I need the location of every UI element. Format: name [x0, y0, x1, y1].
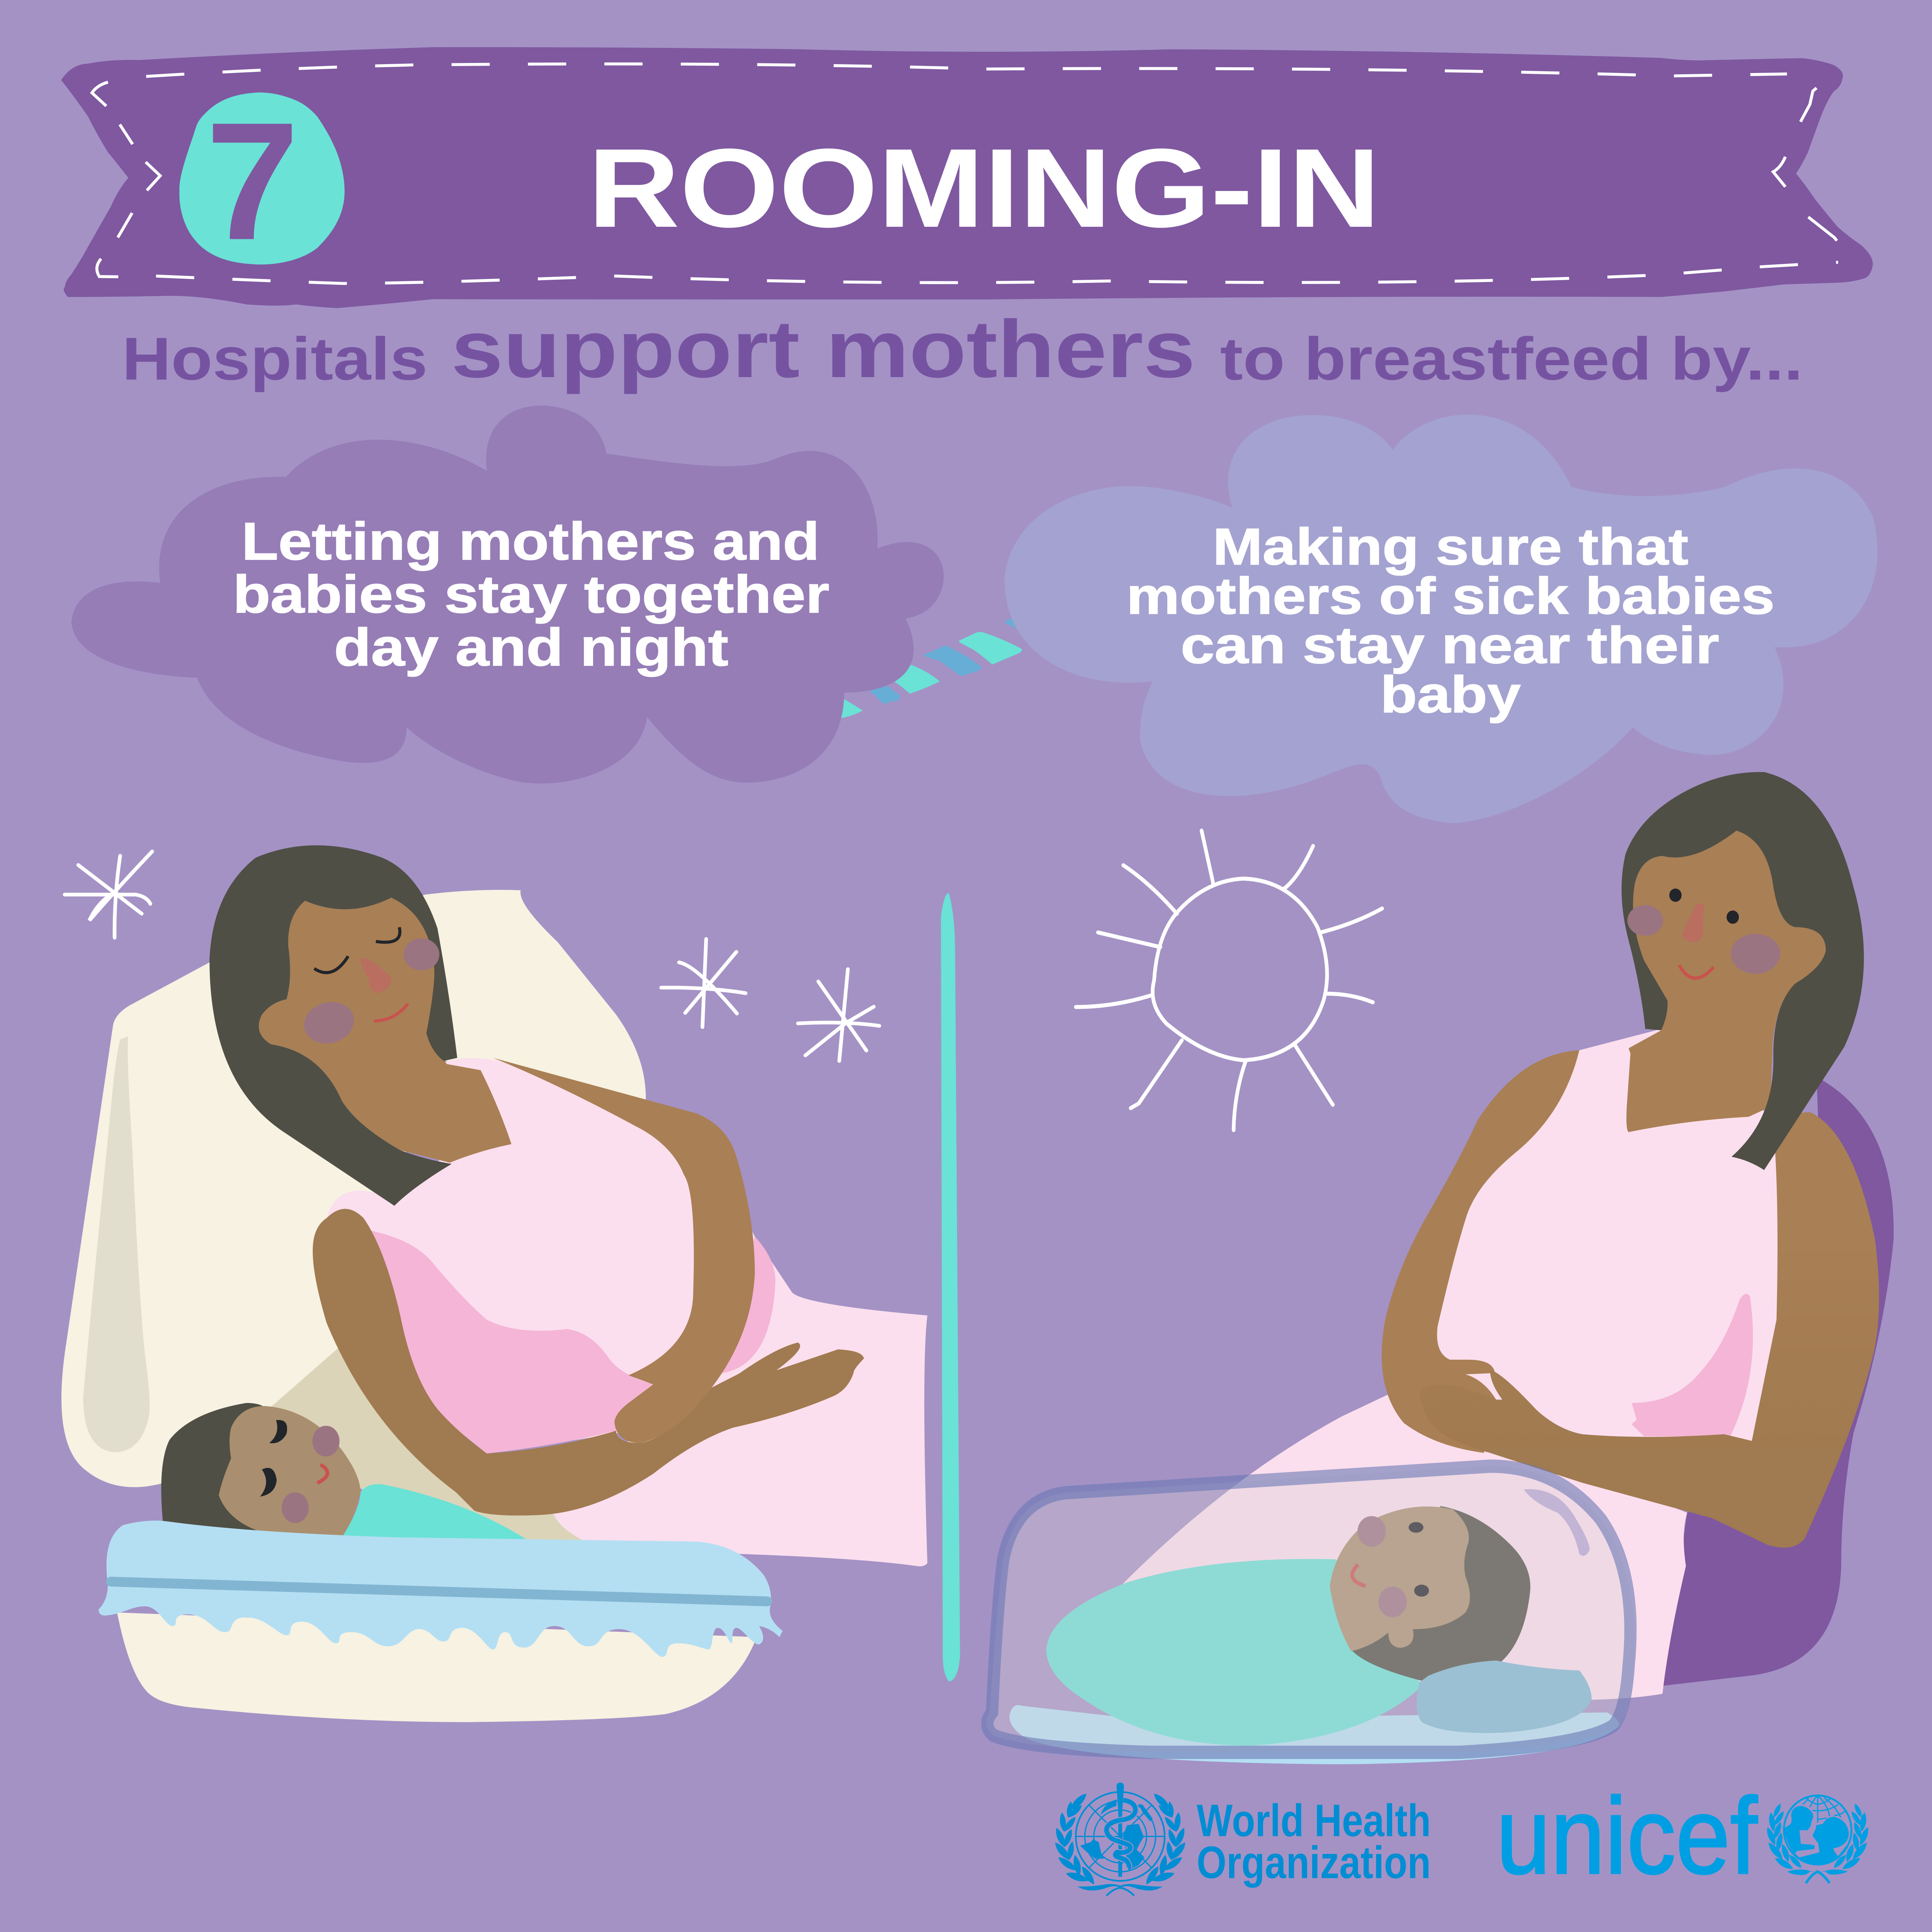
mother dress	[1114, 1029, 1792, 1700]
baby	[161, 1403, 530, 1542]
number badge	[179, 87, 345, 275]
subtitle	[122, 303, 1803, 395]
mother face	[259, 898, 512, 1163]
right cloud text: can stay near their	[1180, 617, 1719, 674]
sick baby	[1046, 1506, 1592, 1746]
banner ribbon	[61, 47, 1873, 308]
left cloud text: babies stay together	[233, 565, 829, 624]
incubator dome	[986, 1466, 1635, 1752]
left scene: mother and baby together	[61, 845, 960, 1722]
right cloud text: baby	[1380, 666, 1521, 723]
mother left arm	[1382, 1050, 1579, 1453]
mother right arm	[1420, 1112, 1879, 1548]
cloud right	[1004, 415, 1878, 823]
bassinet	[99, 1520, 782, 1722]
right scene: mother near sick baby	[986, 772, 1894, 1764]
title: ROOMING-IN	[588, 125, 1380, 251]
icon: sparkles	[65, 852, 879, 1061]
ribbon between clouds	[826, 614, 1029, 718]
logo: unicef emblem	[1765, 1796, 1871, 1883]
mother facial features	[299, 927, 439, 1049]
right cloud text: mothers of sick babies	[1126, 567, 1775, 625]
icon: sun	[1076, 831, 1382, 1130]
subtitle: Hospitals	[122, 325, 428, 393]
logo: unicef wordmark: unicef	[1496, 1776, 1758, 1896]
logo: WHO name: Organization	[1197, 1837, 1431, 1888]
right cloud text	[1126, 518, 1775, 723]
mother hair	[1622, 772, 1864, 1170]
logo: WHO name	[1197, 1795, 1431, 1888]
incubator mattress	[1009, 1705, 1619, 1764]
subtitle: support mothers	[451, 303, 1196, 395]
mother facial features	[1628, 889, 1780, 978]
mother upper arm	[493, 1058, 755, 1443]
mother hair	[209, 845, 457, 1206]
chair	[1663, 1077, 1894, 1686]
subtitle: to breastfeed by...	[1220, 325, 1803, 393]
mother lower arm	[313, 1209, 864, 1515]
left cloud text: Letting mothers and	[242, 512, 820, 571]
logo: WHO name: World Health	[1197, 1795, 1431, 1846]
left cloud text	[233, 512, 829, 677]
blanket	[265, 1347, 592, 1545]
logo: WHO emblem	[1053, 1783, 1188, 1896]
divider	[941, 893, 960, 1682]
number badge: 7	[206, 87, 299, 275]
left cloud text: day and night	[334, 618, 728, 677]
cloud left	[71, 406, 944, 784]
mother face	[1626, 831, 1826, 1132]
mother dress	[327, 1058, 776, 1454]
pillow	[61, 890, 646, 1487]
right cloud text: Making sure that	[1213, 518, 1688, 576]
